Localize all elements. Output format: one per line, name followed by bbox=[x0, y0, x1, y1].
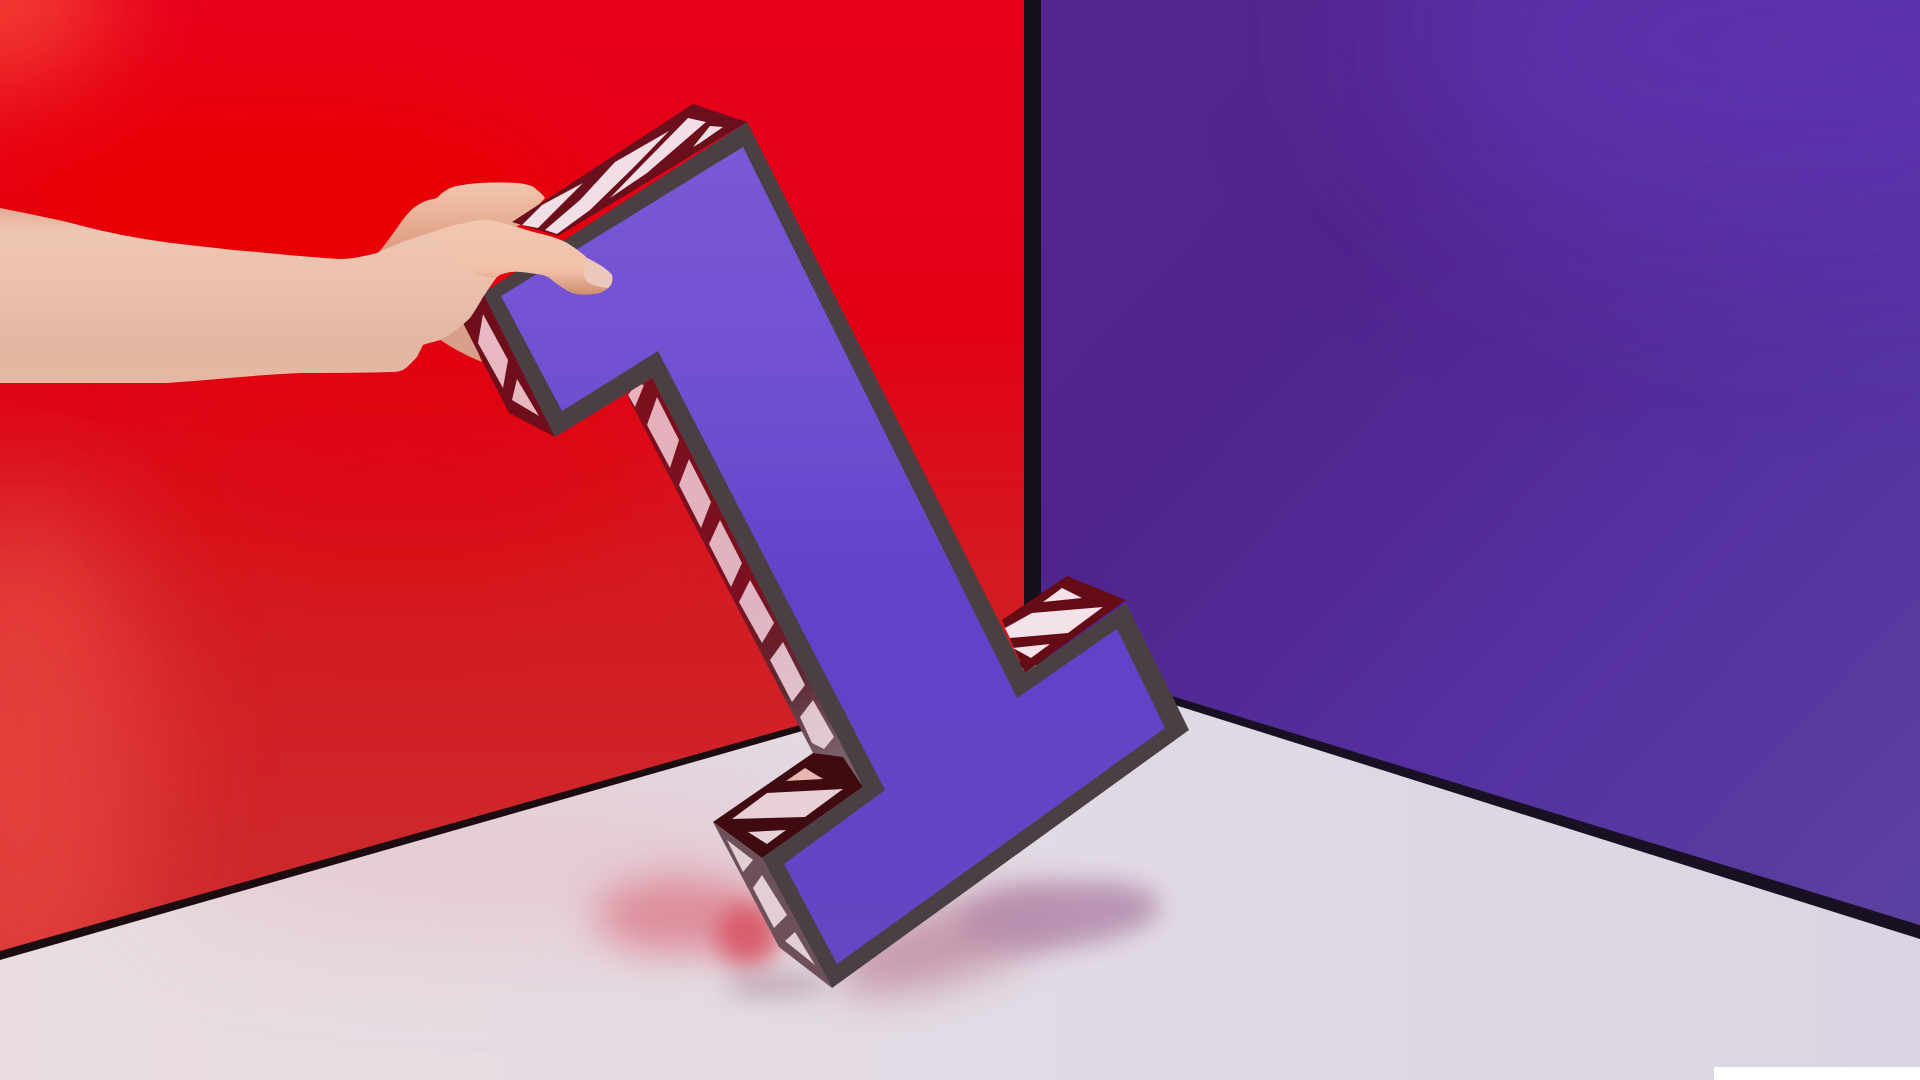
red wall base line bbox=[0, 660, 1030, 960]
black corner post bbox=[1024, 0, 1041, 665]
side: top band bbox=[512, 104, 747, 236]
side: left foot end bbox=[713, 822, 832, 988]
hand: arm and thumb bbox=[0, 208, 612, 383]
number one: front border bbox=[483, 122, 1189, 988]
hand: rear fingers and lower palm bbox=[378, 182, 545, 362]
number one: side panels bbox=[463, 104, 1126, 988]
purple wall bbox=[1041, 0, 1920, 940]
floor glow and shadow bbox=[160, 800, 1163, 1015]
side: left foot top bbox=[713, 753, 863, 858]
side: long stem bbox=[627, 378, 863, 787]
number one: purple face bbox=[501, 147, 1165, 964]
side: right foot top bbox=[1002, 576, 1126, 673]
thumb shading bbox=[433, 220, 612, 295]
side: top-left serif bbox=[463, 293, 555, 437]
thumbnail bbox=[584, 258, 612, 288]
white corner block bbox=[1714, 1067, 1920, 1080]
purple wall base line bbox=[1038, 655, 1920, 939]
red wall bbox=[0, 0, 1024, 1020]
